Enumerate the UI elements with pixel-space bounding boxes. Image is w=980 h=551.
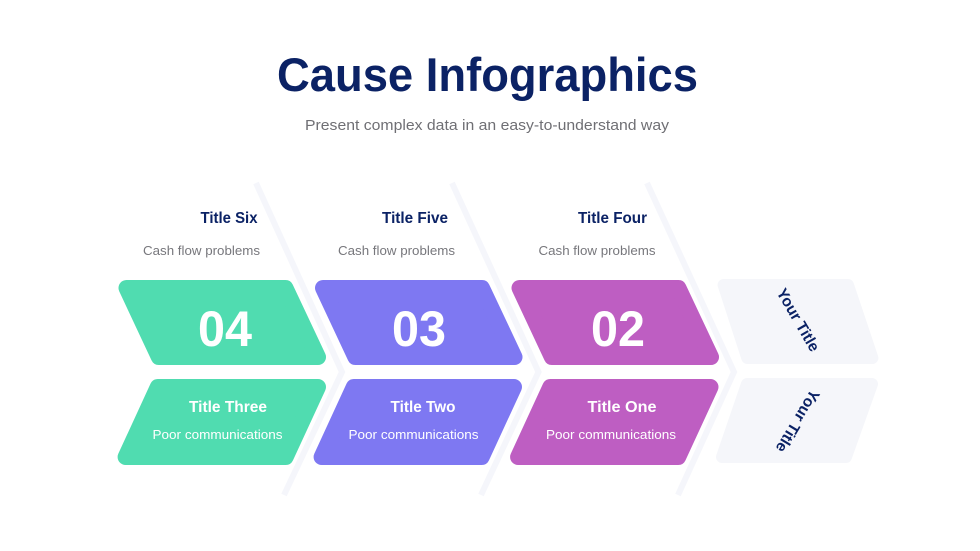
heading: Title Four: Title Four [578, 210, 647, 227]
subtitle: Present complex data in an easy-to-understand way [305, 117, 670, 134]
caption: Cash flow problems: Cash flow problems [143, 243, 261, 258]
panel: green top [126, 288, 318, 357]
column: four / magenta [518, 210, 711, 457]
panel: violet bottom [322, 387, 514, 457]
caption: Poor communications: Poor communications [348, 427, 479, 442]
panel: violet top [323, 288, 514, 357]
column: five / violet [322, 210, 514, 457]
heading: Title Two: Title Two [390, 399, 456, 416]
panel: grey bottom [722, 384, 872, 457]
number: 04: 04 [198, 301, 252, 357]
panel: green bottom [126, 387, 318, 457]
title: Cause Infographics [277, 48, 698, 101]
heading: Title Three: Title Three [189, 399, 267, 416]
heading: Title Six: Title Six [200, 210, 258, 227]
number: 03: 03 [392, 301, 446, 357]
chevron divider 3 [647, 183, 734, 495]
rotated label: Your Title: Your Title [773, 286, 823, 355]
panel: magenta top [520, 288, 711, 357]
panel: grey top [724, 285, 872, 358]
column: six / green [126, 210, 318, 457]
panel: magenta bottom [518, 387, 710, 457]
caption: Cash flow problems: Cash flow problems [538, 243, 656, 258]
rotated label: Your Title: Your Title [772, 386, 822, 455]
caption: Cash flow problems: Cash flow problems [338, 243, 456, 258]
number: 02: 02 [591, 301, 645, 357]
chevron divider 2 [452, 183, 538, 495]
heading: Title One: Title One [588, 399, 657, 416]
caption: Poor communications: Poor communications [152, 427, 283, 442]
heading: Title Five: Title Five [382, 210, 448, 227]
caption: Poor communications: Poor communications [546, 427, 677, 442]
chevron divider 1 [256, 183, 342, 495]
